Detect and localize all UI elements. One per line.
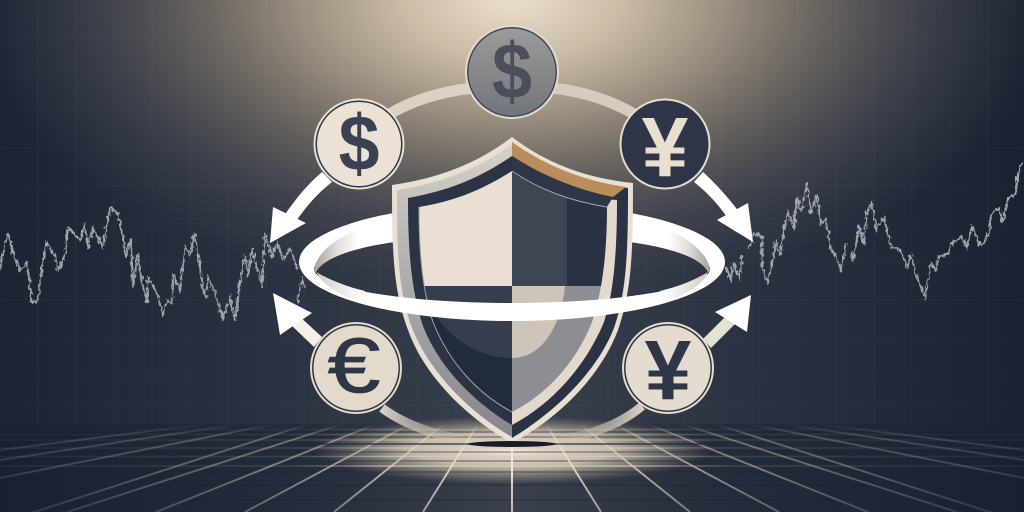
orbit arc: top left	[388, 88, 472, 115]
quadrant: bottom right grey	[512, 286, 601, 412]
arrow: bottom right up	[703, 295, 751, 348]
shield	[392, 137, 633, 443]
shield: left dark band	[408, 156, 512, 425]
coin: bottom left euro: €	[328, 322, 380, 409]
shield: thin inner outline	[419, 171, 607, 412]
quadrant: bottom left highlight	[425, 286, 512, 358]
shield: left grey bevel	[397, 144, 512, 437]
arrow: top left down	[270, 172, 332, 243]
coin: left cream dollar	[314, 98, 404, 190]
orbit arc: top right	[553, 88, 636, 115]
arrow: top right down	[694, 172, 753, 242]
coin: top right dark yen	[620, 98, 710, 194]
perspective floor	[0, 416, 1024, 512]
coin: left cream dollar: $	[339, 99, 379, 188]
floor shadow under shield	[468, 441, 556, 447]
coin: bottom right yen	[622, 322, 714, 417]
quadrant: top right darker	[567, 198, 607, 286]
coin: bottom right yen: ¥	[645, 323, 692, 417]
shield: outer cream rim	[392, 137, 633, 443]
shield: inner quadrants	[419, 171, 607, 412]
quadrant: bottom right cream lens	[512, 286, 565, 358]
quadrant: bottom left dark	[432, 317, 512, 411]
coin: bottom left euro	[310, 322, 402, 414]
line chart: right market line	[726, 162, 1022, 298]
coin: top grey dollar	[465, 25, 559, 119]
coin: top right dark yen: ¥	[642, 100, 689, 194]
orbit arc: bottom left	[382, 408, 480, 441]
orbit ring: front	[302, 272, 722, 321]
shield: gold top strip	[512, 142, 626, 197]
shield: right cream bevel	[512, 166, 617, 425]
shield: right dark band	[512, 144, 628, 438]
coin: top grey dollar: $	[492, 27, 532, 116]
quadrant: top right dark	[512, 165, 568, 286]
shield: dark top of inner bevel	[512, 156, 613, 207]
quadrant: top left cream	[419, 171, 512, 286]
orbit arc: bottom right	[545, 406, 642, 441]
arrow: bottom left up	[273, 293, 322, 347]
line chart: left market line	[0, 208, 305, 320]
orbit ring: back	[299, 203, 725, 321]
